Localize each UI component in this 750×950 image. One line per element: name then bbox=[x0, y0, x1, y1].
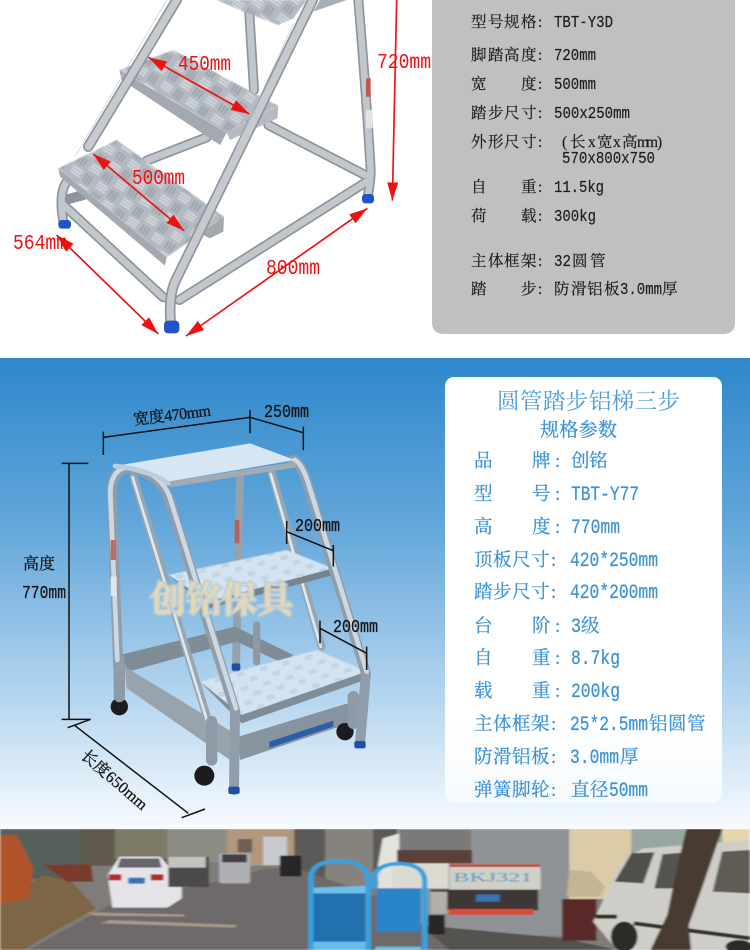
spec rows: (长x宽x高mm) bbox=[562, 132, 662, 151]
arrow: 450mm bbox=[148, 57, 249, 114]
black dimension labels: 200mm bbox=[295, 517, 340, 537]
spec rows: 荷载: bbox=[471, 206, 542, 225]
back post and base frame bbox=[120, 477, 364, 760]
spec rows: 铝圆管 bbox=[649, 714, 706, 735]
main curved frame bbox=[112, 460, 366, 790]
spec rows: 防滑铝板: bbox=[474, 747, 556, 768]
spec rows: 防滑铝板 bbox=[554, 280, 620, 298]
top platform bbox=[115, 443, 295, 482]
spec rows: 台阶: bbox=[474, 616, 560, 637]
front rails bbox=[88, 0, 313, 323]
black dimension labels: 250mm bbox=[264, 403, 309, 423]
truck bbox=[378, 830, 540, 934]
red dimension labels: 564mm bbox=[13, 233, 67, 256]
black dimension labels: 长度650mm bbox=[77, 746, 151, 814]
truck: BKJ321 bbox=[453, 871, 532, 885]
rail thin edges bbox=[75, 0, 293, 213]
spec rows: 直径 bbox=[571, 780, 609, 801]
spec rows bbox=[474, 451, 706, 803]
lower tread bbox=[58, 140, 224, 266]
red dimension labels bbox=[13, 52, 431, 281]
spec rows: 300kg bbox=[554, 208, 596, 227]
black dimension labels: 高度 bbox=[23, 554, 55, 573]
spec rows: 3.0mm bbox=[570, 747, 619, 770]
panel: TBT-Y77 specifications bbox=[445, 377, 722, 803]
spec rows: TBT-Y3D bbox=[554, 14, 613, 33]
photo: street scene with blue ladder bbox=[0, 829, 750, 950]
spec rows: TBT-Y77 bbox=[571, 484, 639, 507]
middle tread bbox=[168, 550, 333, 608]
spec rows: 主体框架: bbox=[471, 252, 542, 270]
spec rows: 高度: bbox=[474, 517, 560, 538]
blue ladder bbox=[309, 861, 425, 950]
arrow: 500mm bbox=[93, 154, 184, 231]
spec rows: 踏步尺寸: bbox=[471, 104, 542, 122]
black dimension labels: 宽度470mm bbox=[132, 402, 212, 429]
spec rows: 型号规格: bbox=[471, 13, 542, 31]
spec rows: 32 bbox=[554, 253, 571, 272]
lower tread bbox=[200, 650, 367, 723]
spec rows: 50mm bbox=[609, 780, 648, 803]
red label on back post bbox=[366, 78, 371, 97]
panel subtitle: 规格参数 bbox=[540, 419, 617, 441]
red dimension labels: 500mm bbox=[132, 168, 185, 191]
road bbox=[29, 868, 459, 950]
spec rows: 宽度: bbox=[471, 75, 542, 93]
panel: TBT-Y3D specifications bbox=[432, 0, 735, 334]
blue gradient section background bbox=[0, 358, 750, 830]
panel title: 圆管踏步铝梯三步 bbox=[497, 389, 680, 414]
red dimension labels: 720mm bbox=[377, 52, 431, 75]
spec rows: 770mm bbox=[571, 517, 620, 540]
spec rows: 500x250mm bbox=[554, 105, 630, 124]
spec rows: 厚 bbox=[620, 747, 639, 768]
spec rows: 脚踏高度: bbox=[471, 45, 542, 64]
spec rows: 自重: bbox=[474, 648, 560, 669]
parked vehicles bbox=[168, 853, 301, 887]
spec rows: 8.7kg bbox=[571, 648, 620, 671]
spec rows: 厚 bbox=[662, 280, 678, 298]
spec rows: 级 bbox=[581, 616, 600, 637]
spec rows: 型号: bbox=[474, 484, 560, 505]
spec rows: 500mm bbox=[554, 76, 596, 95]
spec rows: 720mm bbox=[554, 47, 596, 66]
top tread fragment bbox=[217, 0, 307, 25]
blue feet bbox=[228, 663, 366, 794]
black dimension lines bbox=[62, 410, 367, 818]
spec rows: 载重: bbox=[474, 681, 560, 702]
inner rails bbox=[133, 473, 322, 722]
red dimension labels: 450mm bbox=[178, 54, 231, 77]
spec rows: 创铭 bbox=[571, 451, 608, 472]
spec rows: 顶板尺寸: bbox=[474, 550, 556, 571]
black dimension labels: 200mm bbox=[333, 618, 378, 638]
background buildings bbox=[0, 829, 750, 950]
spec rows: 570x800x750 bbox=[562, 150, 655, 169]
red dimension arrows bbox=[57, 0, 397, 336]
middle tread bbox=[119, 50, 278, 145]
spec rows: 11.5kg bbox=[554, 179, 604, 198]
top section background bbox=[0, 0, 750, 358]
spec rows: 品牌: bbox=[474, 451, 560, 472]
walls and distant car on right bbox=[562, 870, 605, 941]
spec rows: 200kg bbox=[571, 681, 620, 704]
photo: silver aluminium step ladder bbox=[58, 0, 374, 333]
spec rows: 踏步尺寸: bbox=[474, 582, 556, 603]
watermark: 创铭保具 bbox=[150, 580, 298, 620]
spec rows: 外形尺寸: bbox=[471, 133, 542, 151]
spec rows: 420*200mm bbox=[570, 582, 658, 605]
spec rows: 自重: bbox=[471, 178, 542, 196]
casters bbox=[111, 698, 354, 786]
arrow: 720mm bbox=[392, 0, 397, 201]
white car bbox=[108, 857, 182, 908]
spec rows: 25*2.5mm bbox=[570, 714, 648, 737]
black dimension labels bbox=[22, 402, 378, 814]
tree trunk bbox=[651, 829, 722, 950]
white van bbox=[593, 840, 750, 950]
spec rows: 3.0mm bbox=[620, 281, 662, 300]
spec rows: 踏步: bbox=[471, 280, 542, 298]
spec rows bbox=[471, 13, 678, 300]
dry shrubs and orange machine bbox=[0, 875, 96, 950]
spec rows: 圆管 bbox=[572, 252, 606, 270]
black dimension labels: 770mm bbox=[22, 584, 66, 604]
spec rows: 3 bbox=[571, 616, 581, 639]
red dimension labels: 800mm bbox=[266, 258, 320, 281]
ladder rear tubes bbox=[61, 0, 371, 300]
arrow: 564mm bbox=[57, 235, 158, 334]
photo: ladder with casters TBT-Y77 bbox=[110, 443, 367, 794]
spec rows: 420*250mm bbox=[570, 550, 658, 573]
spec rows: 主体框架: bbox=[474, 714, 556, 735]
blue rubber feet bbox=[58, 194, 374, 333]
arrow: 800mm bbox=[186, 208, 367, 336]
spec rows: 弹簧脚轮: bbox=[474, 780, 556, 801]
